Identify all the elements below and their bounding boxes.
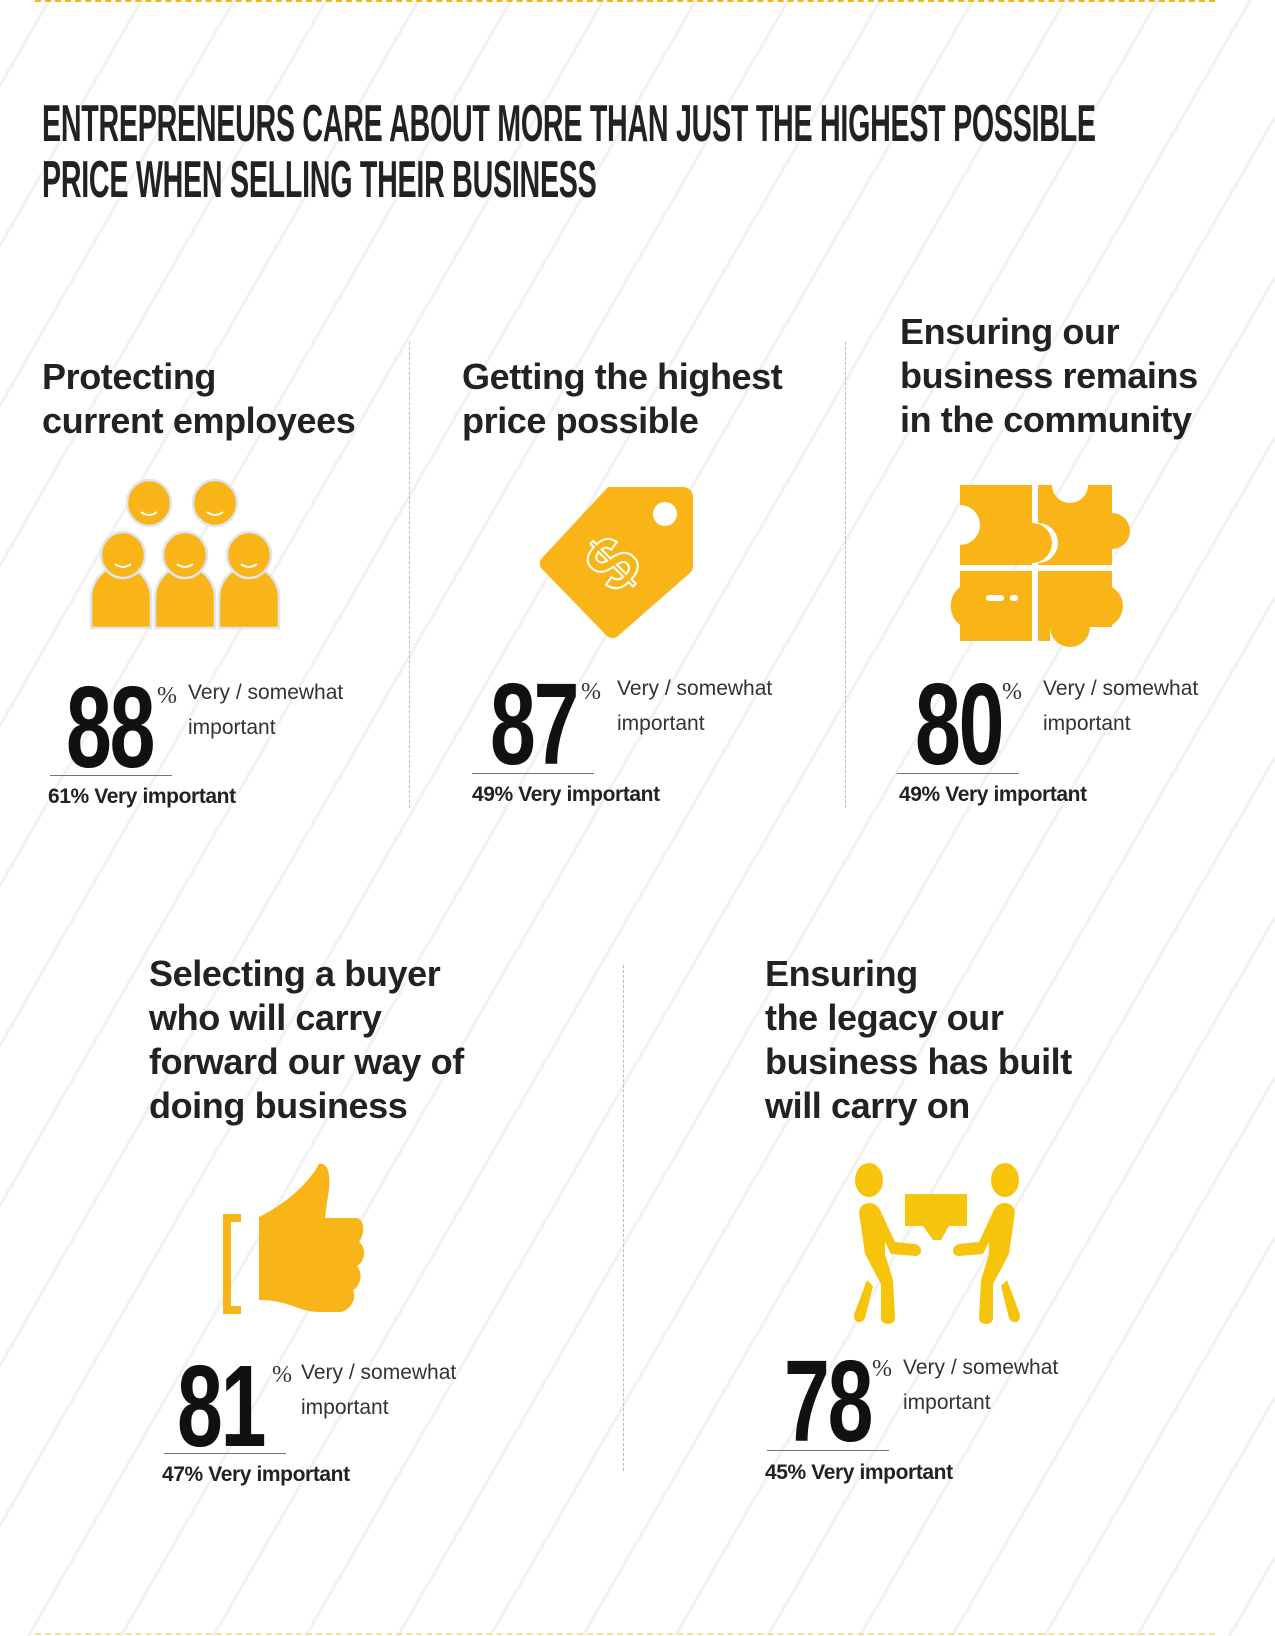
heading: Ensuring our [900, 311, 1119, 352]
rule [472, 773, 594, 774]
bottom dashed border [35, 1633, 1215, 1635]
heading: Selecting a buyer [149, 953, 440, 994]
heading: current employees [42, 400, 355, 441]
label very/somewhat [1043, 677, 1198, 735]
big number 87: 87 [490, 659, 577, 789]
big number 80: 80 [915, 659, 1002, 789]
label very/somewhat [617, 677, 772, 735]
panel: community [897, 311, 1198, 806]
icon: price tag [540, 487, 693, 638]
heading: the legacy our [765, 997, 1003, 1038]
rule [767, 1450, 889, 1451]
label very/somewhat: Very / somewhat [617, 677, 772, 700]
heading: Getting the highest [462, 356, 782, 397]
divider 3 [623, 965, 624, 1471]
title [42, 95, 1096, 209]
label very/somewhat: important [301, 1396, 389, 1419]
title: ENTREPRENEURS CARE ABOUT MORE THAN JUST THE HIGHEST POSSIBLE [42, 95, 1096, 153]
very important: 47% Very important [162, 1463, 350, 1486]
icon: group of people [90, 478, 280, 630]
heading: Ensuring [765, 953, 918, 994]
divider 1 [409, 342, 410, 808]
title: PRICE WHEN SELLING THEIR BUSINESS [42, 151, 596, 209]
very important: 45% Very important [765, 1461, 953, 1484]
big number 88: 88 [66, 662, 153, 792]
rule [897, 773, 1019, 774]
panel: protecting employees [42, 356, 355, 808]
panel: legacy [764, 953, 1072, 1484]
heading: price possible [462, 400, 698, 441]
label very/somewhat: Very / somewhat [1043, 677, 1198, 700]
label very/somewhat: Very / somewhat [301, 1361, 456, 1384]
panel: highest price [462, 356, 782, 806]
rule [164, 1453, 286, 1454]
very important: 49% Very important [472, 783, 660, 806]
big number 78: 78 [784, 1336, 871, 1466]
heading: business has built [765, 1041, 1072, 1082]
percent sign: % [581, 679, 601, 705]
big number 81: 81 [177, 1341, 264, 1471]
label very/somewhat: important [188, 716, 276, 739]
heading: Protecting [42, 356, 216, 397]
percent sign: % [1002, 679, 1022, 705]
rule [50, 775, 172, 776]
heading: forward our way of [149, 1041, 464, 1082]
top dashed border [35, 0, 1215, 2]
label very/somewhat: important [903, 1391, 991, 1414]
heading [900, 311, 1198, 440]
percent sign: % [872, 1356, 892, 1382]
icon: puzzle [950, 485, 1130, 647]
label very/somewhat: important [617, 712, 705, 735]
heading [764, 953, 1072, 1126]
heading: will carry on [765, 1085, 970, 1126]
label very/somewhat: Very / somewhat [903, 1356, 1058, 1379]
icon: price tag: $ [568, 519, 656, 607]
very important: 49% Very important [899, 783, 1087, 806]
heading: in the community [900, 399, 1192, 440]
icon: thumbs up [223, 1164, 364, 1314]
heading [462, 356, 782, 441]
label very/somewhat [903, 1356, 1058, 1414]
label very/somewhat [188, 681, 344, 739]
heading [42, 356, 355, 441]
icon: people carrying box [854, 1163, 1020, 1324]
percent sign: % [157, 683, 177, 709]
heading: doing business [149, 1085, 407, 1126]
heading: business remains [900, 355, 1198, 396]
label very/somewhat [301, 1361, 456, 1419]
label very/somewhat: important [1043, 712, 1131, 735]
panel: selecting a buyer [148, 953, 464, 1486]
percent sign: % [272, 1362, 292, 1388]
very important: 61% Very important [48, 785, 236, 808]
divider 2 [845, 342, 846, 808]
heading [148, 953, 464, 1126]
label very/somewhat: Very / somewhat [188, 681, 343, 704]
heading: who will carry [149, 997, 381, 1038]
